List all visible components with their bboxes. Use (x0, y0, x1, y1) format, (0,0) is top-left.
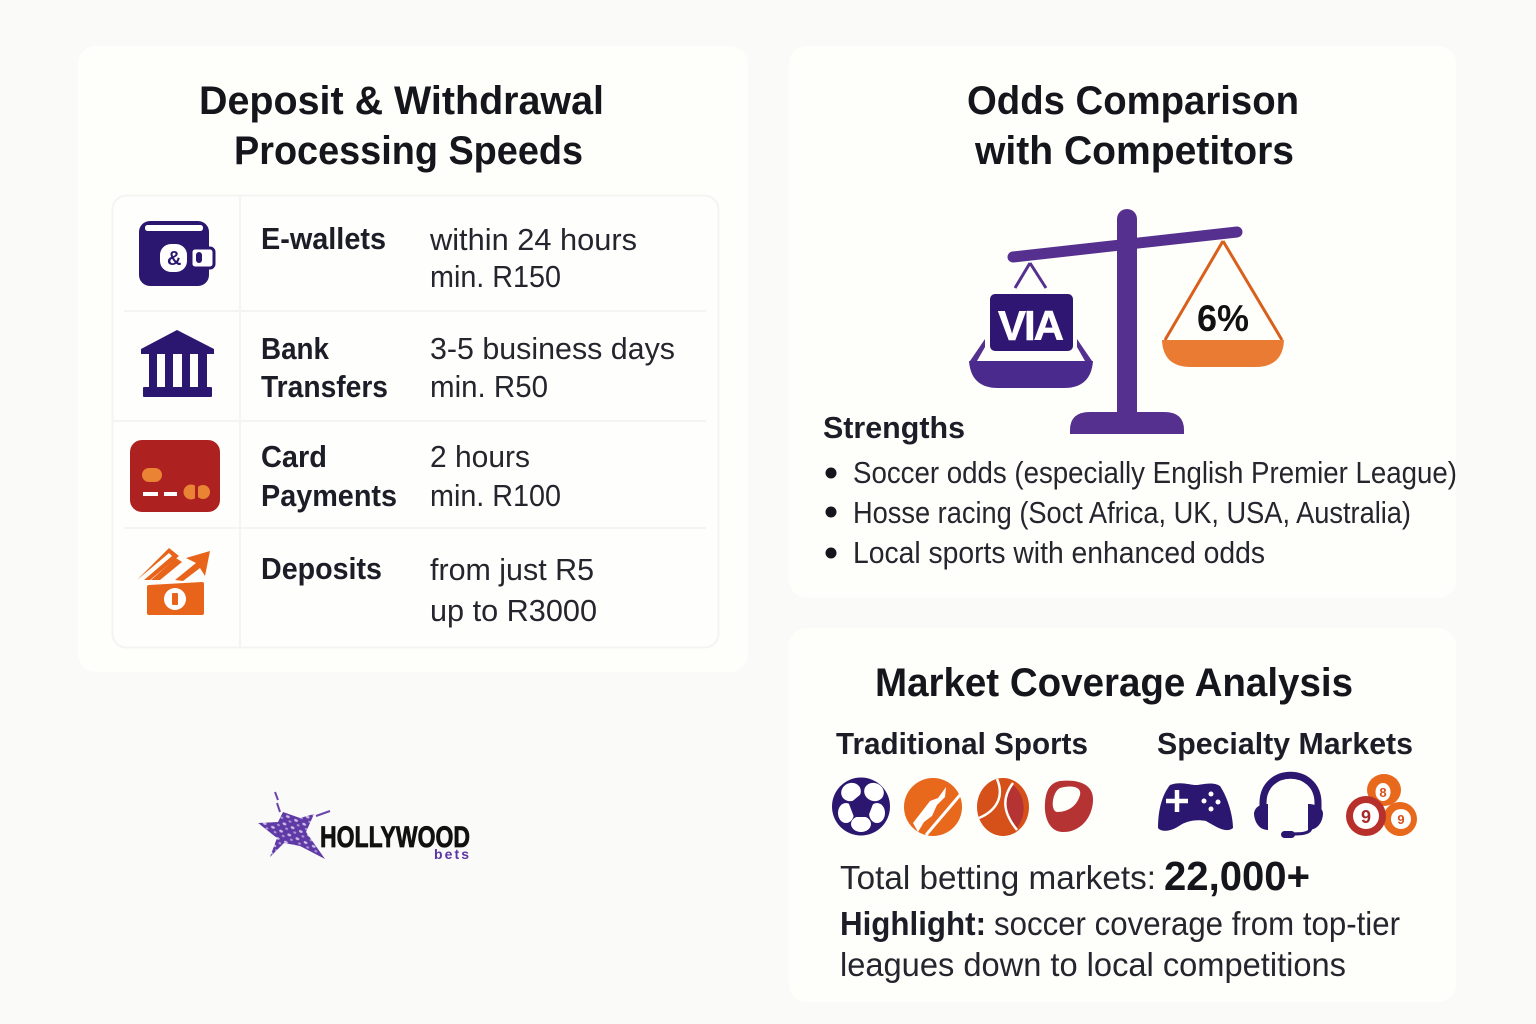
row: e-wallets: min. R150 (430, 259, 561, 294)
row: deposits: up to R3000 (430, 593, 597, 628)
row: e-wallets: within 24 hours (429, 222, 637, 257)
row: deposits: from just R5 (430, 552, 594, 587)
subheading: traditional sports: Traditional Sports (836, 726, 1088, 761)
icon: billiard balls (1346, 774, 1417, 836)
icon: tennis ball (977, 778, 1029, 836)
icon: billiard balls: 9 (1361, 807, 1371, 827)
icon: cricket ball (904, 778, 962, 836)
icon: wallet: & (167, 248, 181, 270)
text: highlight (840, 905, 1400, 983)
heading: odds comparison: with Competitors (974, 129, 1294, 173)
row: deposits: Deposits (261, 551, 382, 586)
text: total betting markets (840, 853, 1310, 899)
row: bank transfers: Transfers (261, 369, 388, 404)
text: highlight: Highlight: (840, 905, 986, 942)
icon: billiard balls: 8 (1379, 785, 1387, 800)
text: total betting markets: Total betting markets: (840, 859, 1156, 896)
icon: headset (1254, 775, 1323, 838)
text: strengths: Soccer odds (especially English Premier League) (853, 455, 1457, 490)
icon: billiard balls: 9 (1397, 812, 1405, 827)
text: strengths: Hosse racing (Soct Africa, UK, USA, Australia) (853, 495, 1411, 530)
row: deposits (261, 551, 597, 628)
text: strengths: Local sports with enhanced odds (853, 535, 1265, 570)
row: bank transfers: 3-5 business days (430, 331, 675, 366)
panel: odds comparison (789, 46, 1457, 598)
logo: hollywoodbets: HOLLYWOOD (320, 821, 470, 854)
logo: hollywoodbets: bets (434, 846, 469, 862)
row: card payments: min. R100 (430, 478, 561, 513)
right pan: 6%: 6% (1197, 298, 1249, 339)
row: card payments: Card (261, 439, 327, 474)
heading: market coverage: Market Coverage Analysis (875, 661, 1353, 705)
heading: deposit and withdrawal: Processing Speeds (234, 129, 583, 173)
row: card payments: 2 hours (430, 439, 530, 474)
icon: wallet (139, 221, 214, 286)
text: strengths (823, 410, 1457, 570)
left pan: via: VIA (998, 302, 1064, 349)
heading: odds comparison (967, 79, 1299, 173)
text: total betting markets: 22,000+ (1164, 853, 1310, 899)
left pan: via (969, 263, 1093, 388)
row: card payments (261, 439, 561, 513)
table: processing speeds (112, 196, 718, 648)
subheading: specialty markets: Specialty Markets (1157, 726, 1413, 761)
icon: star (258, 792, 330, 859)
row: bank transfers: min. R50 (430, 369, 548, 404)
icon: bank (141, 330, 214, 397)
logo: hollywoodbets (258, 792, 470, 862)
text: highlight: soccer coverage from top-tier (994, 905, 1400, 942)
row: e-wallets: E-wallets (261, 221, 386, 256)
row: bank transfers: Bank (261, 331, 330, 366)
text: strengths: Strengths (823, 410, 965, 445)
panel: deposit and withdrawal speeds (78, 46, 748, 672)
row: e-wallets (261, 221, 637, 294)
heading: deposit and withdrawal: Deposit & Withdrawal (199, 79, 604, 123)
right pan: 6% (1162, 241, 1284, 367)
icon: game controller (1158, 783, 1233, 831)
icon: card (130, 440, 220, 512)
icon: soccer ball (832, 778, 890, 836)
row: card payments: Payments (261, 478, 397, 513)
icon: rugby ball (1045, 781, 1093, 832)
text: highlight: leagues down to local competitions (840, 946, 1346, 983)
panel: market coverage (789, 628, 1456, 1002)
row: bank transfers (261, 331, 675, 404)
icon: deposit money with arrow (137, 548, 210, 615)
chart: balance scale (969, 209, 1284, 434)
heading: deposit and withdrawal (199, 79, 604, 173)
heading: odds comparison: Odds Comparison (967, 79, 1299, 123)
